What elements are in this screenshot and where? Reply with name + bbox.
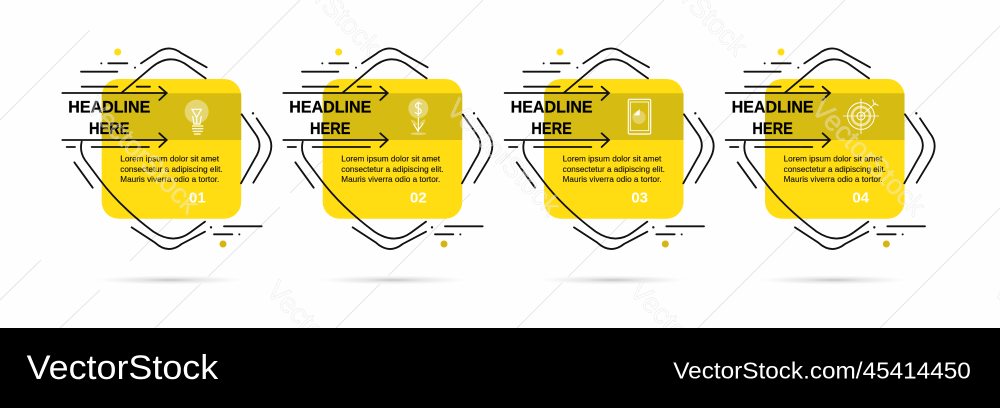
body text 01: consectetur a adipiscing elit. — [120, 164, 223, 174]
number 02: 02 — [410, 190, 427, 207]
yellow card 02 — [323, 79, 462, 219]
body text 01 — [120, 154, 223, 184]
watermark text: VectorStock — [80, 91, 206, 220]
headline 03 — [511, 97, 593, 138]
line art 01 — [62, 48, 271, 249]
footer url text: VectorStock.com/45414450 — [673, 358, 971, 384]
panel: card 04 — [726, 48, 935, 249]
headline 04: HEADLINE — [732, 97, 814, 116]
yellow card 04 — [765, 79, 905, 219]
body text 04: Mauris viverra odio a tortor. — [784, 174, 883, 184]
headline 01 — [68, 97, 150, 138]
header band 04 — [765, 93, 905, 140]
line art 04 — [726, 48, 935, 249]
icon: dollar plant — [408, 98, 428, 135]
body text 02: consectetur a adipiscing elit. — [341, 164, 444, 174]
watermark text: VectorStock — [261, 275, 387, 404]
headline 02 — [289, 97, 371, 138]
headline 03: HERE — [531, 119, 572, 138]
header band 01 — [102, 93, 241, 140]
headline 02: HEADLINE — [289, 97, 371, 116]
icon: phone with chart — [628, 99, 651, 134]
body text 02: Mauris viverra odio a tortor. — [341, 174, 440, 184]
body text 03 — [563, 154, 665, 184]
body text 03: Lorem ipsum dolor sit amet — [563, 154, 662, 164]
icon: light bulb — [185, 100, 209, 134]
panel: card 01 — [62, 48, 271, 249]
headline 01: HEADLINE — [68, 97, 150, 116]
body text 03: consectetur a adipiscing elit. — [563, 164, 665, 174]
body text 04: Lorem ipsum dolor sit amet — [784, 154, 883, 164]
number 04: 04 — [852, 190, 870, 207]
header band 02 — [323, 93, 462, 140]
yellow card 03 — [544, 79, 684, 219]
ground shadows — [88, 275, 915, 285]
body text 03: Mauris viverra odio a tortor. — [563, 174, 662, 184]
watermark text: VectorStock — [624, 275, 750, 404]
watermark text: VectorStock — [441, 93, 567, 222]
body text 04: consectetur a adipiscing elit. — [784, 164, 886, 174]
icon: target — [843, 99, 879, 134]
footer logo text: VectorStock — [27, 349, 219, 387]
body text 01: Lorem ipsum dolor sit amet — [120, 154, 220, 164]
body text 04 — [784, 154, 886, 184]
panel: card 03 — [505, 48, 714, 249]
line art 03 — [505, 48, 714, 249]
footer bar — [0, 328, 1000, 408]
headline 03: HEADLINE — [511, 97, 593, 116]
yellow card 01 — [102, 79, 241, 219]
line art 02 — [283, 48, 492, 249]
headline 04: HERE — [752, 119, 793, 138]
number 01: 01 — [189, 190, 206, 207]
headline 02: HERE — [310, 119, 350, 138]
number 03: 03 — [631, 190, 648, 207]
body text 02 — [341, 154, 444, 184]
body text 02: Lorem ipsum dolor sit amet — [341, 154, 441, 164]
header band 03 — [544, 93, 684, 140]
headline 01: HERE — [89, 119, 130, 138]
panel: card 02 — [283, 48, 492, 249]
headline 04 — [732, 97, 814, 138]
watermark text: VectorStock — [806, 93, 932, 222]
body text 01: Mauris viverra odio a tortor. — [120, 174, 219, 184]
